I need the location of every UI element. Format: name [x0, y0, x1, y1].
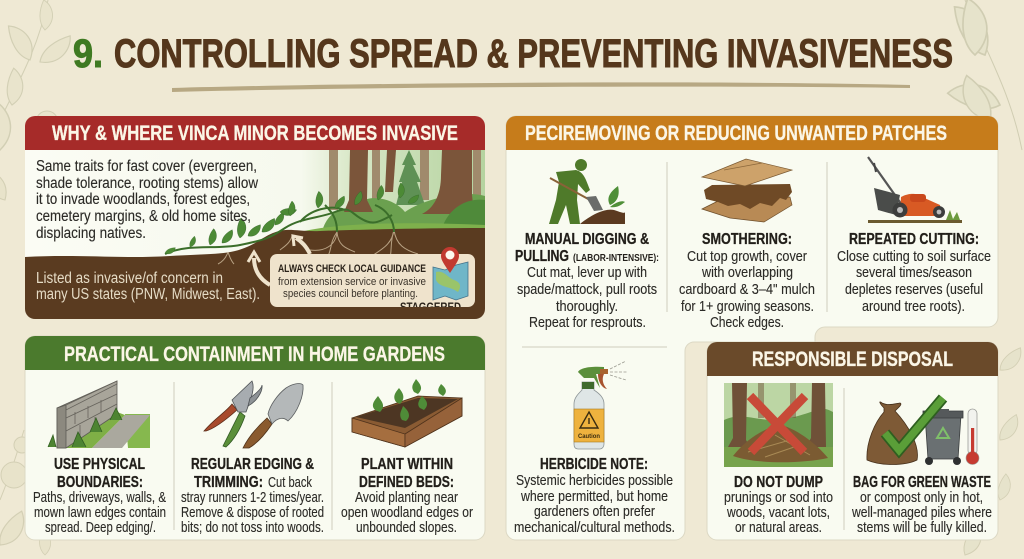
text: why vinca invades: shade tolerance, rooting stems) allow — [36, 175, 259, 192]
panel header: disposal — [707, 342, 998, 376]
panel header: containment: PRACTICAL CONTAINMENT IN HOME GARDENS — [64, 343, 445, 366]
column: do not dump: DO NOT DUMP — [734, 474, 823, 491]
panel header: invasive — [25, 116, 485, 150]
column: repeated cutting: Close cutting to soil surface — [837, 249, 991, 265]
icon: cardboard and mulch — [702, 159, 792, 222]
text: listed as invasive: Listed as invasive/of concern in — [36, 270, 223, 287]
column: smothering: SMOTHERING: — [702, 231, 792, 248]
column: plant within defined beds: DEFINED BEDS: — [359, 474, 454, 491]
panel header: containment — [25, 336, 485, 370]
illustration: forest and spreading vinca — [25, 150, 485, 319]
column: regular edging and trimming: Cut back — [268, 475, 313, 491]
column: smothering — [679, 231, 815, 331]
column: plant within defined beds: Avoid planting near — [355, 490, 458, 506]
column: bag for green waste — [851, 474, 992, 536]
column: regular edging and trimming: Remove & dispose of rooted — [181, 505, 324, 521]
column: regular edging and trimming: stray runners 1-2 times/year. — [181, 490, 324, 506]
column: smothering: for 1+ growing seasons. — [681, 299, 814, 315]
column: herbicide note — [514, 456, 675, 536]
panel header: disposal: RESPONSIBLE DISPOSAL — [752, 348, 953, 371]
column: plant within defined beds: unbounded slopes. — [356, 520, 457, 536]
column: smothering: cardboard & 3–4" mulch — [679, 282, 815, 298]
column: herbicide note: Systemic herbicides possible — [516, 473, 673, 489]
callout: always check local guidance — [270, 247, 475, 307]
column: smothering: Cut top growth, cover — [687, 249, 807, 265]
icon: pruners and trowel — [204, 381, 303, 448]
column: smothering: with overlapping — [701, 265, 793, 281]
column: do not dump — [724, 474, 833, 536]
column: plant within defined beds: PLANT WITHIN — [361, 456, 453, 473]
text: why vinca invades: it to invade woodlands, forest edges, — [36, 191, 250, 208]
column: repeated cutting — [837, 231, 991, 315]
callout: always check local guidance: species council before planting. — [283, 288, 418, 300]
callout: always check local guidance: ALWAYS CHECK LOCAL GUIDANCE — [278, 263, 426, 275]
text: listed as invasive — [36, 270, 260, 303]
icon: wall and path — [48, 381, 150, 448]
column: manual digging and pulling — [515, 231, 659, 331]
column: use physical boundaries: BOUNDARIES: — [57, 474, 143, 491]
icon: map and pin — [433, 247, 468, 300]
stray label: staggered: STAGGERED — [400, 300, 461, 314]
icon: spray bottle — [574, 361, 627, 449]
icon: person digging — [549, 159, 625, 224]
text: listed as invasive: many US states (PNW, Midwest, East). — [36, 286, 260, 303]
column: regular edging and trimming — [181, 456, 324, 536]
column: herbicide note: mechanical/cultural methods. — [514, 520, 675, 536]
panel: removing or reducing unwanted patches — [506, 116, 998, 540]
column: manual digging and pulling: Repeat for resprouts. — [529, 315, 646, 331]
column: manual digging and pulling: Cut mat, lever up with — [527, 265, 647, 281]
column: regular edging and trimming: REGULAR EDGING & — [191, 456, 314, 473]
column: plant within defined beds: open woodland edges or — [341, 505, 473, 521]
column: do not dump: woods, vacant lots, — [726, 505, 830, 521]
column: manual digging and pulling: MANUAL DIGGING & — [525, 231, 649, 248]
panel header: invasive: WHY & WHERE VINCA MINOR BECOMES INVASIVE — [52, 122, 458, 145]
botanical decoration: top right — [947, 0, 1022, 150]
panel: why and where vinca minor becomes invasive — [25, 116, 485, 319]
column: bag for green waste: or compost only in hot, — [860, 490, 983, 506]
column: use physical boundaries: USE PHYSICAL — [54, 456, 145, 473]
column: bag for green waste: well-managed piles where — [851, 505, 992, 521]
botanical decoration: top left — [0, 0, 77, 151]
icon: bag, bin, checkmark, thermometer — [867, 398, 979, 465]
title underline — [172, 82, 910, 92]
column: regular edging and trimming: TRIMMING: — [194, 474, 263, 491]
icon: lawn mower — [868, 157, 962, 223]
callout: always check local guidance: from extension service or invasive — [278, 276, 426, 288]
column: use physical boundaries: Paths, driveways, walls, & — [33, 490, 166, 506]
column: manual digging and pulling: thoroughly. — [556, 299, 618, 315]
column: manual digging and pulling: PULLING — [515, 248, 569, 265]
icon: spray bottle: Caution — [578, 433, 600, 440]
column: smothering: Check edges. — [710, 315, 784, 331]
column: repeated cutting: several times/season — [856, 265, 972, 281]
column: use physical boundaries: spread. Deep edging/. — [45, 520, 156, 536]
text: why vinca invades: cemetery margins, & old home sites, — [36, 208, 251, 225]
column: herbicide note: HERBICIDE NOTE: — [540, 456, 648, 473]
text: why vinca invades: Same traits for fast cover (evergreen, — [36, 158, 257, 175]
column: repeated cutting: depletes reserves (useful — [845, 282, 983, 298]
column: bag for green waste: stems will be fully killed. — [857, 520, 987, 536]
panel: practical containment in home gardens — [25, 336, 485, 540]
panel: responsible disposal — [707, 342, 998, 540]
column: regular edging and trimming: bits; do not toss into woods. — [181, 520, 324, 536]
column: do not dump: prunings or sod into — [724, 490, 833, 506]
column: do not dump: or natural areas. — [735, 520, 822, 536]
column: use physical boundaries — [33, 456, 166, 536]
text: why vinca invades — [36, 158, 259, 242]
title: 9. — [73, 32, 103, 76]
panel header: removing — [506, 116, 998, 150]
column: repeated cutting: REPEATED CUTTING: — [849, 231, 979, 248]
column: herbicide note: gardeners often prefer — [534, 504, 655, 520]
column: use physical boundaries: mown lawn edges contain — [34, 505, 166, 521]
column: manual digging and pulling: spade/mattock, pull roots — [517, 282, 657, 298]
text: why vinca invades: displacing natives. — [36, 225, 146, 242]
botanical decoration: lower left — [0, 165, 53, 556]
botanical decoration: lower right — [957, 347, 1024, 558]
arrows: spreading out from callout — [248, 236, 310, 285]
column: herbicide note: where permitted, but home — [520, 489, 668, 505]
icon: do not dump scene — [724, 383, 833, 467]
column: repeated cutting: around tree roots). — [862, 299, 965, 315]
icon: raised bed — [352, 379, 462, 447]
column: manual digging and pulling: (LABOR-INTENSIVE): — [573, 253, 659, 264]
column: plant within defined beds — [341, 456, 473, 536]
